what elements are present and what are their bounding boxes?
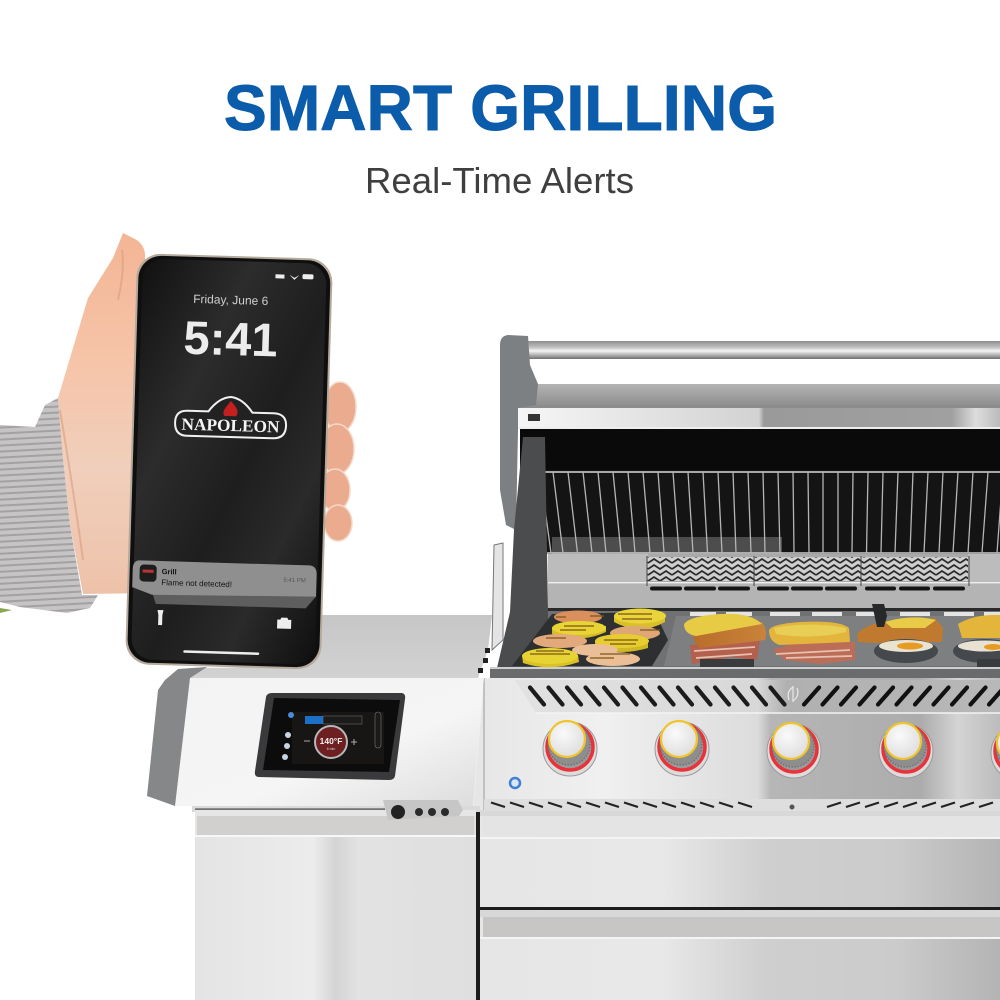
shelf lower lip bbox=[192, 806, 480, 812]
griddle tray bbox=[490, 608, 1000, 678]
control panel bbox=[473, 678, 1000, 810]
home bar bbox=[183, 650, 259, 655]
title: SMART GRILLING bbox=[224, 72, 777, 144]
bacon bbox=[690, 640, 760, 664]
green background scrap bbox=[0, 608, 12, 613]
bread slices bbox=[693, 622, 766, 648]
notification: 5:41 PM bbox=[283, 578, 306, 584]
lid side bracket bbox=[500, 335, 538, 530]
spatula handle bbox=[872, 604, 887, 627]
button strip bbox=[383, 800, 463, 820]
camera icon bbox=[277, 618, 291, 629]
Napoleon logo bbox=[175, 395, 287, 439]
emblem bbox=[788, 686, 798, 702]
hand crease bbox=[60, 250, 123, 560]
lid band bbox=[518, 384, 1000, 429]
knob 4 bbox=[879, 723, 933, 778]
notification: Grill bbox=[162, 567, 177, 576]
upper drawer bbox=[480, 810, 1000, 907]
back wall bbox=[547, 554, 1000, 610]
right griddle food bbox=[684, 604, 1000, 667]
knob 2 bbox=[655, 721, 709, 776]
subtitle: Real-Time Alerts bbox=[365, 160, 634, 201]
herringbone vents bbox=[647, 557, 968, 581]
date: Friday, June 6 bbox=[193, 292, 269, 308]
temperature dial: 140°F bbox=[320, 736, 342, 746]
touch screen bbox=[255, 693, 405, 780]
knob 1 bbox=[543, 721, 597, 776]
left griddle food bbox=[522, 608, 666, 667]
knob 3 bbox=[767, 723, 821, 778]
temperature dial bbox=[315, 726, 347, 758]
knob 5 bbox=[991, 725, 1000, 780]
side hardware bbox=[492, 543, 503, 650]
side shelf top bbox=[178, 615, 492, 678]
sleeve bbox=[0, 398, 98, 613]
lower drawer bbox=[479, 910, 1000, 1000]
grey end cap bbox=[147, 667, 207, 806]
minus and plus bbox=[304, 739, 357, 745]
flashlight icon bbox=[157, 610, 164, 625]
phone bbox=[125, 253, 333, 670]
notification: Flame not detected! bbox=[161, 578, 232, 589]
hand bbox=[58, 233, 150, 594]
cabinet gaps bbox=[476, 812, 1000, 1000]
Napoleon logo: NAPOLEON bbox=[181, 415, 281, 437]
lid interior bbox=[520, 429, 1000, 471]
left firebox wall bbox=[497, 437, 552, 668]
screen tabs bbox=[305, 716, 362, 724]
clock: 5:41 bbox=[183, 311, 278, 366]
temperature dial: 6 min bbox=[327, 747, 335, 751]
hand holding phone bbox=[0, 233, 356, 670]
lower vent bbox=[484, 799, 1000, 811]
lid handle bar bbox=[526, 341, 1000, 359]
right pill bbox=[375, 712, 381, 748]
shelf corner clips bbox=[478, 648, 490, 673]
left cabinet door bbox=[195, 810, 476, 1000]
blue badge bbox=[510, 778, 520, 788]
fingers bbox=[320, 382, 356, 541]
notification bbox=[132, 560, 317, 609]
grill illustration bbox=[147, 335, 1000, 1000]
screen nav icons bbox=[282, 712, 294, 760]
side shelf front bbox=[175, 678, 484, 806]
griddle handles bbox=[700, 659, 1000, 667]
vent band bbox=[515, 680, 1000, 713]
warming rack bbox=[537, 470, 1000, 554]
egg rings bbox=[874, 639, 1000, 663]
status bar bbox=[275, 273, 314, 280]
